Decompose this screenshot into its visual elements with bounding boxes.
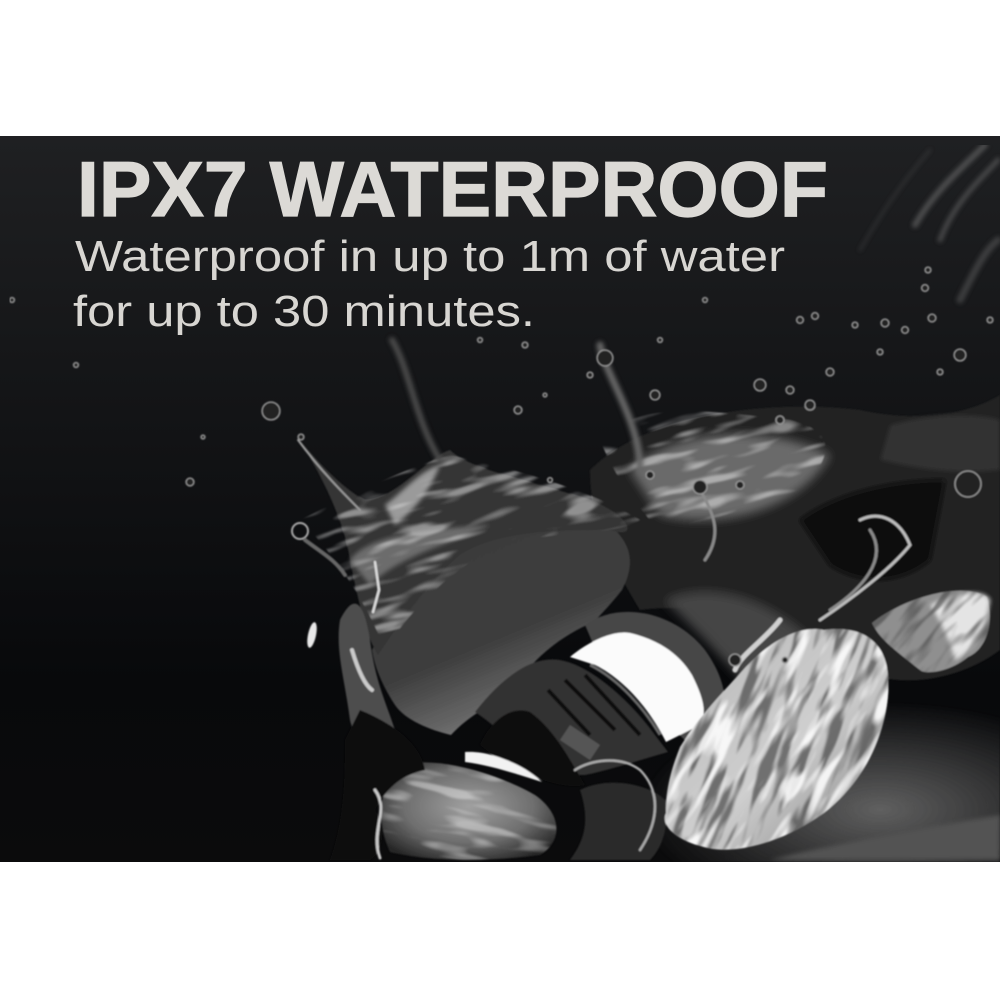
water texture: streaks in splash	[664, 628, 890, 850]
subtitle: Waterproof in up to 1m of water	[75, 232, 785, 281]
upper right water blob	[872, 591, 990, 672]
water texture: streaks in blob	[872, 590, 990, 672]
glow: water surface at lower right	[660, 710, 1000, 862]
flashlight: lower lantern highlight	[465, 752, 542, 782]
panel background	[0, 136, 1000, 862]
water crown: left rim	[298, 438, 627, 742]
flashlight: rim around lantern	[585, 612, 725, 745]
bright ripple on surface	[770, 815, 1000, 860]
water droplets	[10, 267, 993, 666]
water texture on crown	[305, 410, 826, 634]
water texture on orb	[382, 766, 557, 861]
water crown details	[292, 440, 379, 690]
title: IPX7 WATERPROOF	[77, 145, 828, 233]
flashlight: glowing lantern band	[570, 632, 704, 742]
subtitle: for up to 30 minutes.	[73, 287, 535, 336]
dark fold of water at lower left	[330, 710, 666, 860]
water orb around flashlight front	[381, 762, 556, 860]
photo panel: flashlight splashing in water	[0, 136, 1000, 924]
water strands above the flashlight	[375, 340, 910, 858]
infographic canvas	[0, 136, 1000, 862]
large bright water splash at right	[665, 629, 888, 850]
highlight: streak on left of bowl	[305, 621, 319, 649]
flashlight body: back section	[590, 395, 1000, 710]
subtitle	[73, 232, 785, 336]
flashlight: knurled collar	[475, 659, 668, 786]
ripples: top right water surface	[860, 145, 998, 300]
water bowl: translucent crown interior	[372, 521, 630, 735]
photo scene: water and flashlight	[10, 145, 1000, 924]
